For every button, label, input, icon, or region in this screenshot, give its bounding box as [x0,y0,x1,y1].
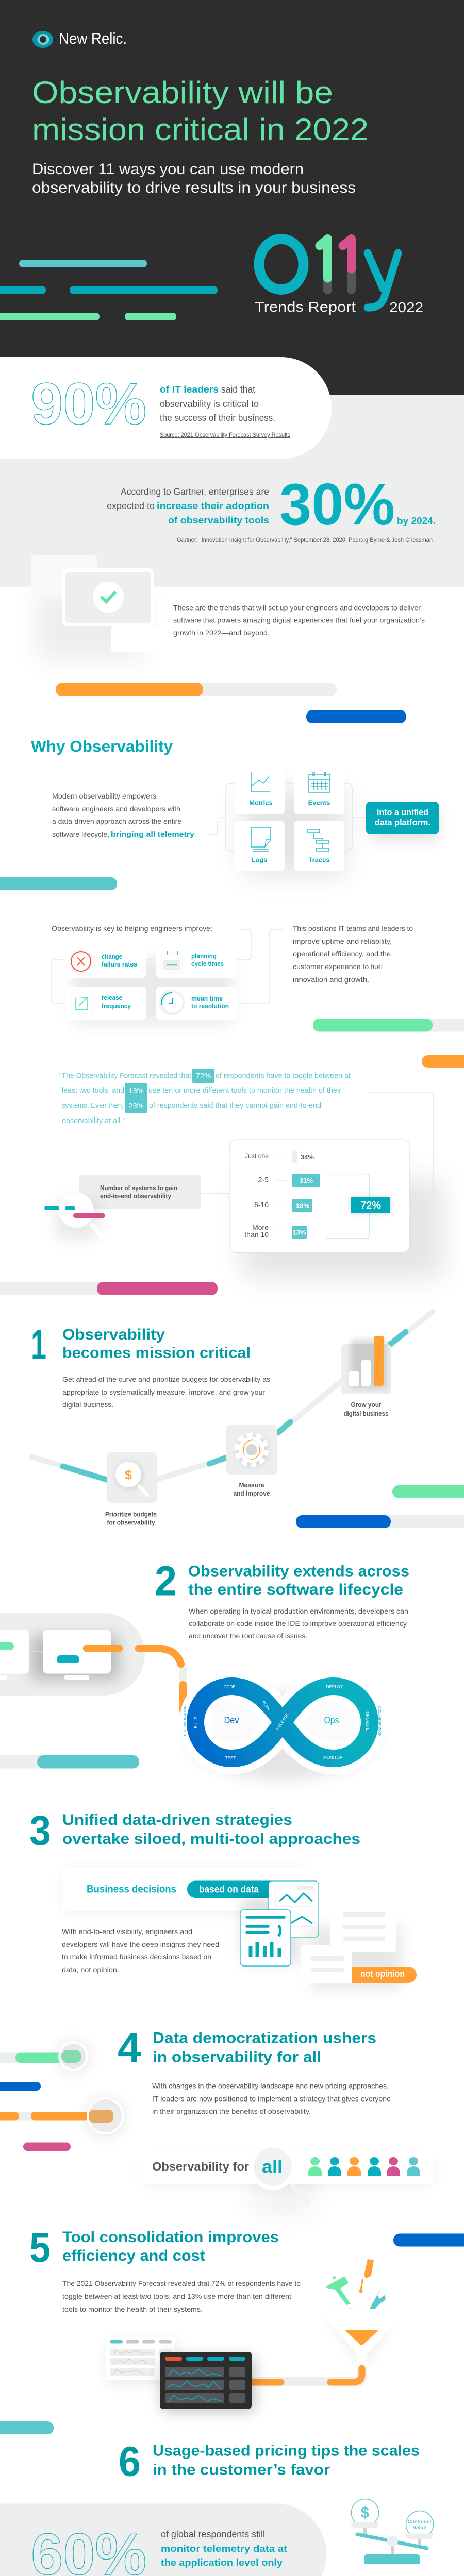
O11y Trends Report logo [255,239,423,315]
why observability text: software lifecycle, [52,830,109,838]
trend 4 heading: Data democratization ushers [153,2030,376,2046]
illustration: data streams with lenses [0,2041,125,2151]
bar: more than 10 13% [292,1226,307,1239]
card: mean time to resolution: mean time [191,994,223,1002]
illustration: monitors pipeline [0,1613,183,1716]
text: this positions: innovation and growth. [293,975,369,984]
icon: wrench [369,2290,386,2310]
panel: observability for all: Observability for [152,2160,249,2173]
title: mission critical in 2022 [32,112,369,147]
trend 3 text [62,1927,219,1974]
icon: chart cards [240,1881,319,1966]
trend 3 text: to make informed business decisions based on [62,1953,211,1961]
trend 1 text [62,1375,270,1409]
badge 23% [125,1098,147,1113]
60 percent description: the application level only [161,2557,283,2568]
trend 2 heading [188,1563,409,1598]
trend 4 heading [153,2030,376,2066]
intro text: software that powers amazing digital experiences that fuel your organization’s [173,616,425,624]
bar: light teal lower [0,1755,139,1768]
big 30 percent: 30% [279,472,395,537]
coin: customer value [406,2511,433,2538]
light dashboard [106,2337,175,2383]
infinity labels: COLLABORATION [184,1705,187,1736]
30 percent description: increase their adoption [157,501,269,511]
card: mean time to resolution [156,987,237,1020]
text: improve heading: Observability is key to helping engineers improve: [52,924,212,933]
illustration: tools funnel [106,2259,401,2411]
trend 5 text [62,2279,301,2313]
infinity labels: DEPLOY [326,1685,343,1689]
trend 6 number: 6 [119,2438,141,2485]
bar: blue right [296,1515,464,1528]
icon: magnifier [44,1193,105,1239]
text: this positions: customer experience to fuel [293,962,383,971]
monitor right [43,1630,111,1680]
diagram: engineer metrics [52,929,284,1025]
tile: grow your digital business [341,1336,391,1417]
panel: 30% stat [107,472,436,544]
trend 4 text: IT leaders are now positioned to implement a strategy that gives everyone [152,2095,391,2103]
chart row labels: 2-5 [258,1176,269,1184]
O11y Trends Report logo: Trends Report [255,299,356,315]
illustration: scale [351,2499,434,2564]
trend 3 text: With end-to-end visibility, engineers and [62,1927,192,1936]
bar: green right [392,1485,464,1498]
callout: number of systems: Number of systems to gain [100,1184,177,1192]
trend 5 heading [62,2229,279,2264]
card: release frequency: frequency [102,1002,131,1010]
quote: use ten or more different tools to monitor the health of their [148,1086,341,1095]
chart: growth line [32,1312,433,1526]
90 percent description: said that [221,384,255,395]
bar: pink [0,1282,218,1295]
trend 4 text [152,2081,391,2115]
icon: speech bubbles [301,1903,417,1989]
bar: orange [56,683,337,696]
bar: just one 34% [292,1150,314,1163]
trend 5 text: tools to monitor the health of their systems. [62,2305,203,2313]
badge 13%: 13% [128,1087,144,1095]
trend 3 heading [62,1811,360,1848]
coin: dollar: $ [361,2504,370,2521]
dark dashboard [160,2352,254,2411]
intro text [173,604,425,637]
tile: measure and improve: and improve [233,1489,270,1497]
text: this positions: This positions IT teams and leaders to [293,924,413,933]
infinity DevOps diagram [184,1685,381,1780]
pipeline arrow [87,1649,183,1716]
title [32,75,369,147]
light gray band [0,395,464,586]
icon: hammer [325,2276,351,2305]
why observability text: software engineers and developers with [52,805,180,813]
why observability text: bringing all telemetry [111,830,195,839]
tile: measure and improve [226,1425,277,1497]
intro text: These are the trends that will set up your engineers and developers to deliver [173,604,421,612]
panel: 60% stat [0,2504,326,2576]
bar: green [313,1019,464,1031]
icon: screwdriver [359,2259,374,2293]
panel: observability for all [138,2144,434,2218]
quote: least two tools, and [62,1086,124,1095]
infinity labels: PLAN [261,1700,271,1711]
trend 6 heading [153,2442,420,2478]
tile: measure and improve: Measure [239,1481,264,1489]
trend 2 number: 2 [155,1558,177,1604]
bar: 6-10 18% [292,1199,312,1212]
tile: prioritize budgets: $ [125,1468,132,1482]
monitor left [0,1630,29,1680]
bar: 6-10 18%: 18% [296,1201,309,1210]
90 percent description [160,384,275,423]
quote [59,1069,351,1125]
panel: business decisions [62,1868,319,1966]
diagram: telemetry into platform [209,763,439,876]
tile: prioritize budgets: for observability [107,1519,155,1526]
infinity labels: BUILD [194,1716,198,1728]
chart row labels: than 10 [244,1230,269,1239]
chart row labels: 6-10 [254,1200,269,1209]
90 percent description: observability is critical to [160,399,259,409]
callout: 72% total: 72% [360,1200,381,1211]
subtitle: observability to drive results in your business [32,179,356,196]
New Relic logo: New Relic. [59,29,127,47]
New Relic logo [32,29,127,48]
card: change failure rates: failure rates [102,960,137,968]
trend 3 text: data, not opinion. [62,1965,119,1974]
text: this positions [293,924,413,984]
why observability text: Modern observability empowers [52,792,156,800]
bar: orange right [422,1055,464,1068]
trend 4 text: in their organization the benefits of observability. [152,2107,311,2115]
chart: number of systems [201,1092,443,1278]
trend 5 text: The 2021 Observability Forecast revealed that 72% of respondents have to [62,2279,301,2287]
pill: based on data: based on data [199,1885,259,1895]
gartner source: Gartner: "Innovation Insight for Observability," September 28, 2020, Padraig Byrne & Josh Chessman [177,536,433,544]
bar: blue top right [393,2234,464,2246]
pipe [252,2367,362,2382]
30 percent description: According to Gartner, enterprises are [121,486,269,497]
icon: people row [308,2157,420,2176]
trend 2 text: and uncover the root cause of issues. [189,1632,307,1640]
trend 1 heading: Observability [62,1326,165,1343]
why observability text [52,792,195,839]
O11y Trends Report logo: 2022 [389,299,423,315]
title: Observability will be [32,75,333,110]
trend 3 heading: overtake siloed, multi-tool approaches [62,1831,360,1848]
30 percent description: expected to [107,501,155,511]
trend 3 number: 3 [29,1807,51,1854]
soft shadow [36,592,144,659]
card: traces [294,821,344,871]
badge 72%: 72% [195,1072,211,1080]
trend 5 heading: efficiency and cost [62,2247,205,2264]
trend 5 heading: Tool consolidation improves [62,2229,279,2246]
bar: blue [306,710,406,723]
text: this positions: improve uptime and reliability, [293,937,392,945]
callout: unified data platform [366,802,439,834]
subtitle [32,161,356,196]
chart row labels [244,1151,269,1239]
quote: systems. Even then, [62,1101,124,1110]
card: metrics: Metrics [249,799,273,807]
trend 1 number: 1 [31,1321,46,1368]
trend 2 heading: Observability extends across [188,1563,409,1580]
trend 2 text: collaborate on code inside the IDE to improve operational efficiency [189,1619,407,1628]
card: mean time to resolution: to resolution [191,1002,229,1010]
trend 1 heading [62,1326,251,1361]
bar: 2-5 31% [292,1174,320,1187]
coin: customer value: Value [413,2525,426,2531]
trend 6 heading: in the customer’s favor [153,2462,330,2478]
why observability text: a data-driven approach across the entire [52,817,181,825]
coin: customer value: Customer [408,2519,432,2525]
trend 3 heading: Unified data-driven strategies [62,1811,292,1828]
infinity labels: RELEASE [275,1713,289,1731]
callout: unified data platform: data platform. [375,818,430,827]
panel: intro [0,555,464,689]
30 percent description [107,486,436,526]
trend 4 heading: in observability for all [153,2048,321,2066]
card: logs [235,821,285,871]
card: release frequency: release [102,994,122,1002]
bar: light teal left [0,2421,54,2434]
pill: based on data [187,1880,280,1898]
card: release frequency [65,987,146,1020]
60 percent description: of global respondents still [161,2529,265,2539]
big 90 percent: 90% [31,371,146,437]
card: change failure rates: change [102,953,122,960]
source: Source: 2021 Observability Forecast Survey Results [160,431,290,438]
trend 1 text: digital business. [62,1400,113,1409]
card: events [294,763,344,814]
panel: business decisions: Business decisions [87,1884,176,1895]
trend 5 number: 5 [29,2224,51,2271]
tile: prioritize budgets: Prioritize budgets [105,1511,157,1518]
bar: light teal [0,877,117,890]
intro text: growth in 2022—and beyond. [173,629,270,637]
bar: just one 34%: 34% [301,1153,314,1161]
quote: “The Observability Forecast revealed that [59,1072,192,1080]
coin: dollar [352,2499,378,2527]
90 percent description: the success of their business. [160,413,275,423]
decorative header bars [0,260,218,320]
bar: more than 10 13%: 13% [292,1228,306,1236]
card: metrics [235,763,285,814]
infinity labels: TEST [225,1756,236,1760]
callout: number of systems: end-to-end observability [100,1192,172,1200]
chart row labels: More [252,1223,269,1231]
card: change failure rates [65,944,146,978]
icon: magnifier all: all [262,2157,283,2177]
30 percent description: of observability tools [168,515,269,526]
callout: number of systems [44,1175,201,1239]
infinity labels: MONITOR [323,1755,343,1760]
bar: 2-5 31%: 31% [300,1177,313,1184]
60 percent description [161,2529,287,2568]
trend 4 number: 4 [118,2025,141,2071]
badge 13% [125,1083,147,1098]
trend 3 text: developers will have the deep insights they need [62,1940,219,1948]
card: logs: Logs [251,856,268,863]
Dev label: Dev [224,1715,239,1725]
icon: check card [62,568,154,626]
infinity labels: CODE [223,1685,236,1689]
trend 1 heading: becomes mission critical [62,1345,251,1361]
chart row labels: Just one [245,1151,269,1160]
text: this positions: operational efficiency, and the [293,950,391,958]
card: traces: Traces [308,856,330,863]
panel: 90% stat [0,357,332,459]
90 percent description: of IT leaders [160,384,219,395]
callout: unified data platform: into a unified [377,807,428,817]
subtitle: Discover 11 ways you can use modern [32,161,304,178]
card: planning cycle times: planning [191,952,217,960]
tile: grow your digital business: digital business [343,1410,389,1417]
quote: observability at all.” [62,1116,125,1125]
30 percent description: by 2024. [397,516,436,526]
60 percent description: monitor telemetry data at [161,2544,287,2554]
trend 1 text: appropriate to systematically measure, improve, and grow your [62,1388,265,1396]
trend 1 text: Get ahead of the curve and prioritize budgets for observability as [62,1375,270,1383]
badge 23%: 23% [128,1101,144,1110]
card: planning cycle times: cycle times [191,960,224,968]
quote: of respondents have to toggle between at [216,1072,351,1080]
infinity labels: COLLABORATION [377,1706,381,1736]
tile: grow your digital business: Grow your [351,1401,382,1409]
trend 4 text: With changes in the observability landscape and new pricing approaches, [152,2081,389,2090]
badge 72% [192,1069,214,1083]
quote: of respondents said that they cannot gain end-to-end [149,1101,321,1110]
trend 2 text [189,1607,408,1640]
icon: magnifier all [250,2144,308,2204]
infinity labels: OPERATE [365,1711,370,1731]
Ops label: Ops [324,1715,339,1725]
trend 6 heading: Usage-based pricing tips the scales [153,2442,420,2460]
tile: prioritize budgets [105,1452,157,1526]
trend 5 text: toggle between at least two tools, and 13% use more than ten different [62,2292,291,2300]
heading: why observability: Why Observability [31,737,173,755]
infinity labels [184,1685,381,1760]
trend 2 text: When operating in typical production environments, developers can [189,1607,408,1615]
card: events: Events [308,799,330,807]
callout: 72% total [351,1197,390,1213]
trend 2 heading: the entire software lifecycle [188,1581,403,1598]
icon: speech bubbles: not opinion [360,1969,405,1979]
funnel [323,2309,401,2369]
header background [0,0,464,395]
card: planning cycle times [156,944,237,978]
